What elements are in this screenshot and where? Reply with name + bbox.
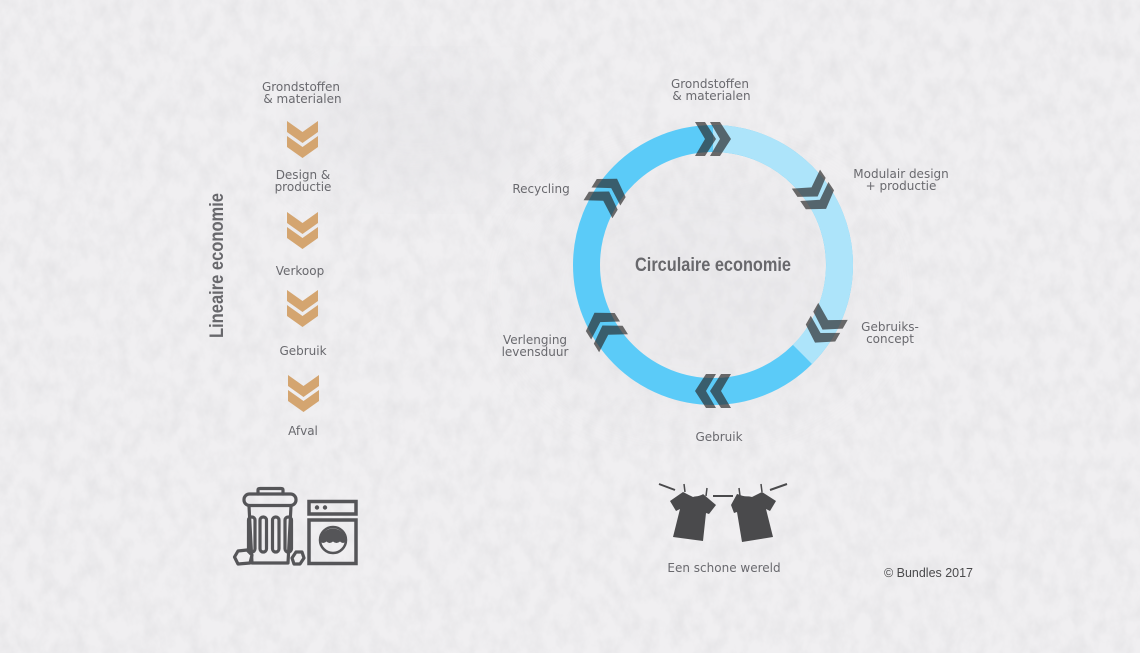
icon: t-shirts on a line bbox=[659, 484, 787, 542]
label: circular Grondstoffen & materialen: & materialen bbox=[672, 89, 751, 103]
arrow: bottom bbox=[695, 374, 731, 408]
label: Gebruiks-concept: concept bbox=[866, 332, 914, 346]
label: Grondstoffen & materialen: & materialen bbox=[263, 92, 342, 106]
arrow: lower right bbox=[800, 303, 848, 351]
chart: circular economy ring bbox=[586, 138, 840, 392]
label: Modulair design + productie: Modulair design bbox=[853, 167, 949, 181]
label: Verlenging levensduur: Verlenging bbox=[503, 333, 567, 347]
arrow: chevrons 4 bbox=[288, 375, 319, 412]
label: Gebruik: Gebruik bbox=[279, 344, 327, 358]
label: Modulair design + productie: + productie bbox=[866, 179, 936, 193]
label: Grondstoffen & materialen: Grondstoffen bbox=[262, 80, 340, 94]
panel: linear economy steps bbox=[262, 80, 342, 438]
arrow: lower left bbox=[580, 304, 628, 352]
icon: washing machine bbox=[309, 502, 356, 564]
label: Verlenging levensduur: levensduur bbox=[502, 345, 568, 359]
icon: trash can bbox=[234, 488, 304, 564]
arrow: upper right bbox=[792, 170, 840, 218]
arrows: ring chevrons bbox=[580, 122, 848, 408]
arrow: chevrons 1 bbox=[287, 121, 318, 158]
label: Verkoop: Verkoop bbox=[276, 264, 324, 278]
label: Afval: Afval bbox=[288, 424, 318, 438]
label: circular Grondstoffen & materialen: Grondstoffen bbox=[671, 77, 749, 91]
label: Design & productie: Design & bbox=[276, 168, 330, 182]
heading: Circulaire economie: Circulaire economie bbox=[635, 255, 791, 276]
credit: © Bundles 2017 bbox=[884, 565, 973, 580]
arrow: upper left bbox=[584, 170, 631, 218]
label: Recycling: Recycling bbox=[512, 182, 570, 196]
arrow: chevrons 3 bbox=[287, 290, 318, 327]
arrow: chevrons 2 bbox=[287, 212, 318, 249]
label: Design & productie: productie bbox=[275, 180, 331, 194]
label: Een schone wereld: Een schone wereld bbox=[667, 561, 781, 575]
label: circular Gebruik: Gebruik bbox=[695, 430, 743, 444]
heading: Lineaire economie: Lineaire economie bbox=[207, 193, 228, 338]
label: Gebruiks-concept: Gebruiks- bbox=[861, 320, 919, 334]
arrow: top bbox=[695, 122, 731, 156]
